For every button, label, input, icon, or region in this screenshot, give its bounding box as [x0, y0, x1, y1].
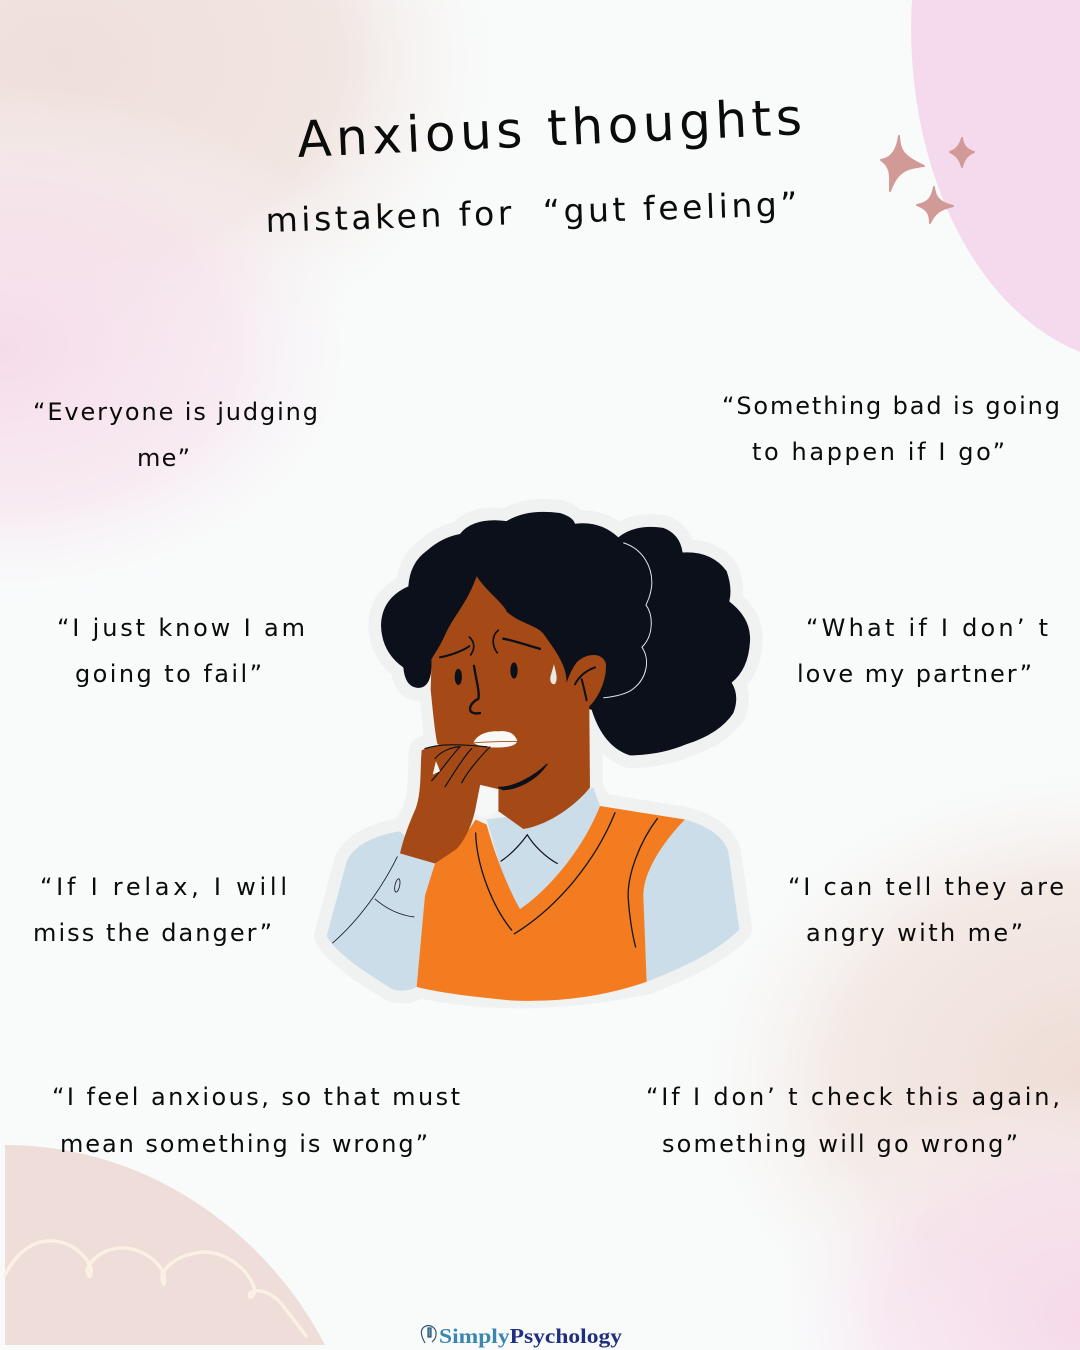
- title: Anxious thoughts: [296, 88, 803, 169]
- quote: something bad: to happen if I go”: [752, 438, 1005, 466]
- collar lines: [501, 835, 557, 863]
- quote: going to fail: [57, 614, 305, 688]
- hair: [381, 512, 750, 755]
- quote: miss the danger: [33, 873, 287, 947]
- mouth line: [473, 741, 523, 743]
- icon: sparkles: [881, 136, 974, 223]
- quote: everyone judging: [33, 398, 318, 472]
- hand: [400, 745, 492, 863]
- sleeve lines: [333, 857, 414, 943]
- quote: love my partner: [797, 614, 1048, 688]
- icon: head: [421, 1326, 436, 1343]
- cloud line: [5, 1241, 306, 1336]
- left sleeve: [327, 831, 435, 991]
- quote: angry with me: “I can tell they are: [788, 873, 1064, 901]
- teeth: [473, 731, 517, 748]
- quote: everyone judging: “Everyone is judging: [33, 398, 318, 426]
- hair highlight: [603, 543, 652, 698]
- quote: check this again: something will go wrong”: [662, 1130, 1018, 1158]
- vest lines: [476, 813, 657, 947]
- beige blob: bottom left: [5, 1145, 325, 1345]
- quote: miss the danger: miss the danger”: [33, 919, 272, 947]
- quote: feel anxious: mean something is wrong”: [60, 1130, 428, 1158]
- quote: check this again: [646, 1083, 1060, 1158]
- quote: something bad: [722, 392, 1060, 466]
- shirt collar and front: [487, 787, 600, 911]
- quote: feel anxious: “I feel anxious, so that must: [52, 1083, 460, 1111]
- tear: [550, 664, 557, 684]
- subtitle: mistaken for “gut feeling”: [265, 184, 798, 240]
- illustration: anxious woman biting nails: [327, 512, 750, 1001]
- fingernail gap: [433, 761, 440, 775]
- quote: feel anxious: [52, 1083, 460, 1158]
- finger lines: [425, 745, 490, 787]
- face and neck: [431, 576, 606, 829]
- quote: love my partner: “What if I don’ t: [806, 614, 1048, 642]
- quote: going to fail: going to fail”: [75, 660, 262, 688]
- brows: [440, 630, 540, 657]
- logo: Simply Psychology: Simply Psychology: [439, 1324, 622, 1348]
- quote: love my partner: love my partner”: [797, 660, 1032, 688]
- lower lip: [498, 764, 547, 790]
- quote: something bad: “Something bad is going: [722, 392, 1060, 420]
- quote: everyone judging: me”: [137, 444, 190, 472]
- sticker outline: [327, 512, 750, 996]
- soft gradient: top left: [0, 0, 540, 620]
- nose: [470, 666, 480, 713]
- quote: angry with me: angry with me”: [806, 919, 1023, 947]
- ear lines: [575, 667, 595, 700]
- quote: angry with me: [788, 873, 1064, 947]
- eyes: [455, 662, 518, 685]
- pink blob: top right: [911, 0, 1080, 352]
- gap under chin: [476, 787, 498, 819]
- quote: check this again: “If I don’ t check this again,: [646, 1083, 1060, 1111]
- right sleeve: [640, 820, 739, 982]
- orange vest: [417, 806, 685, 1001]
- quote: miss the danger: “If I relax, I will: [40, 873, 287, 901]
- quote: going to fail: “I just know I am: [57, 614, 305, 642]
- soft gradient: bottom right: [660, 740, 1080, 1350]
